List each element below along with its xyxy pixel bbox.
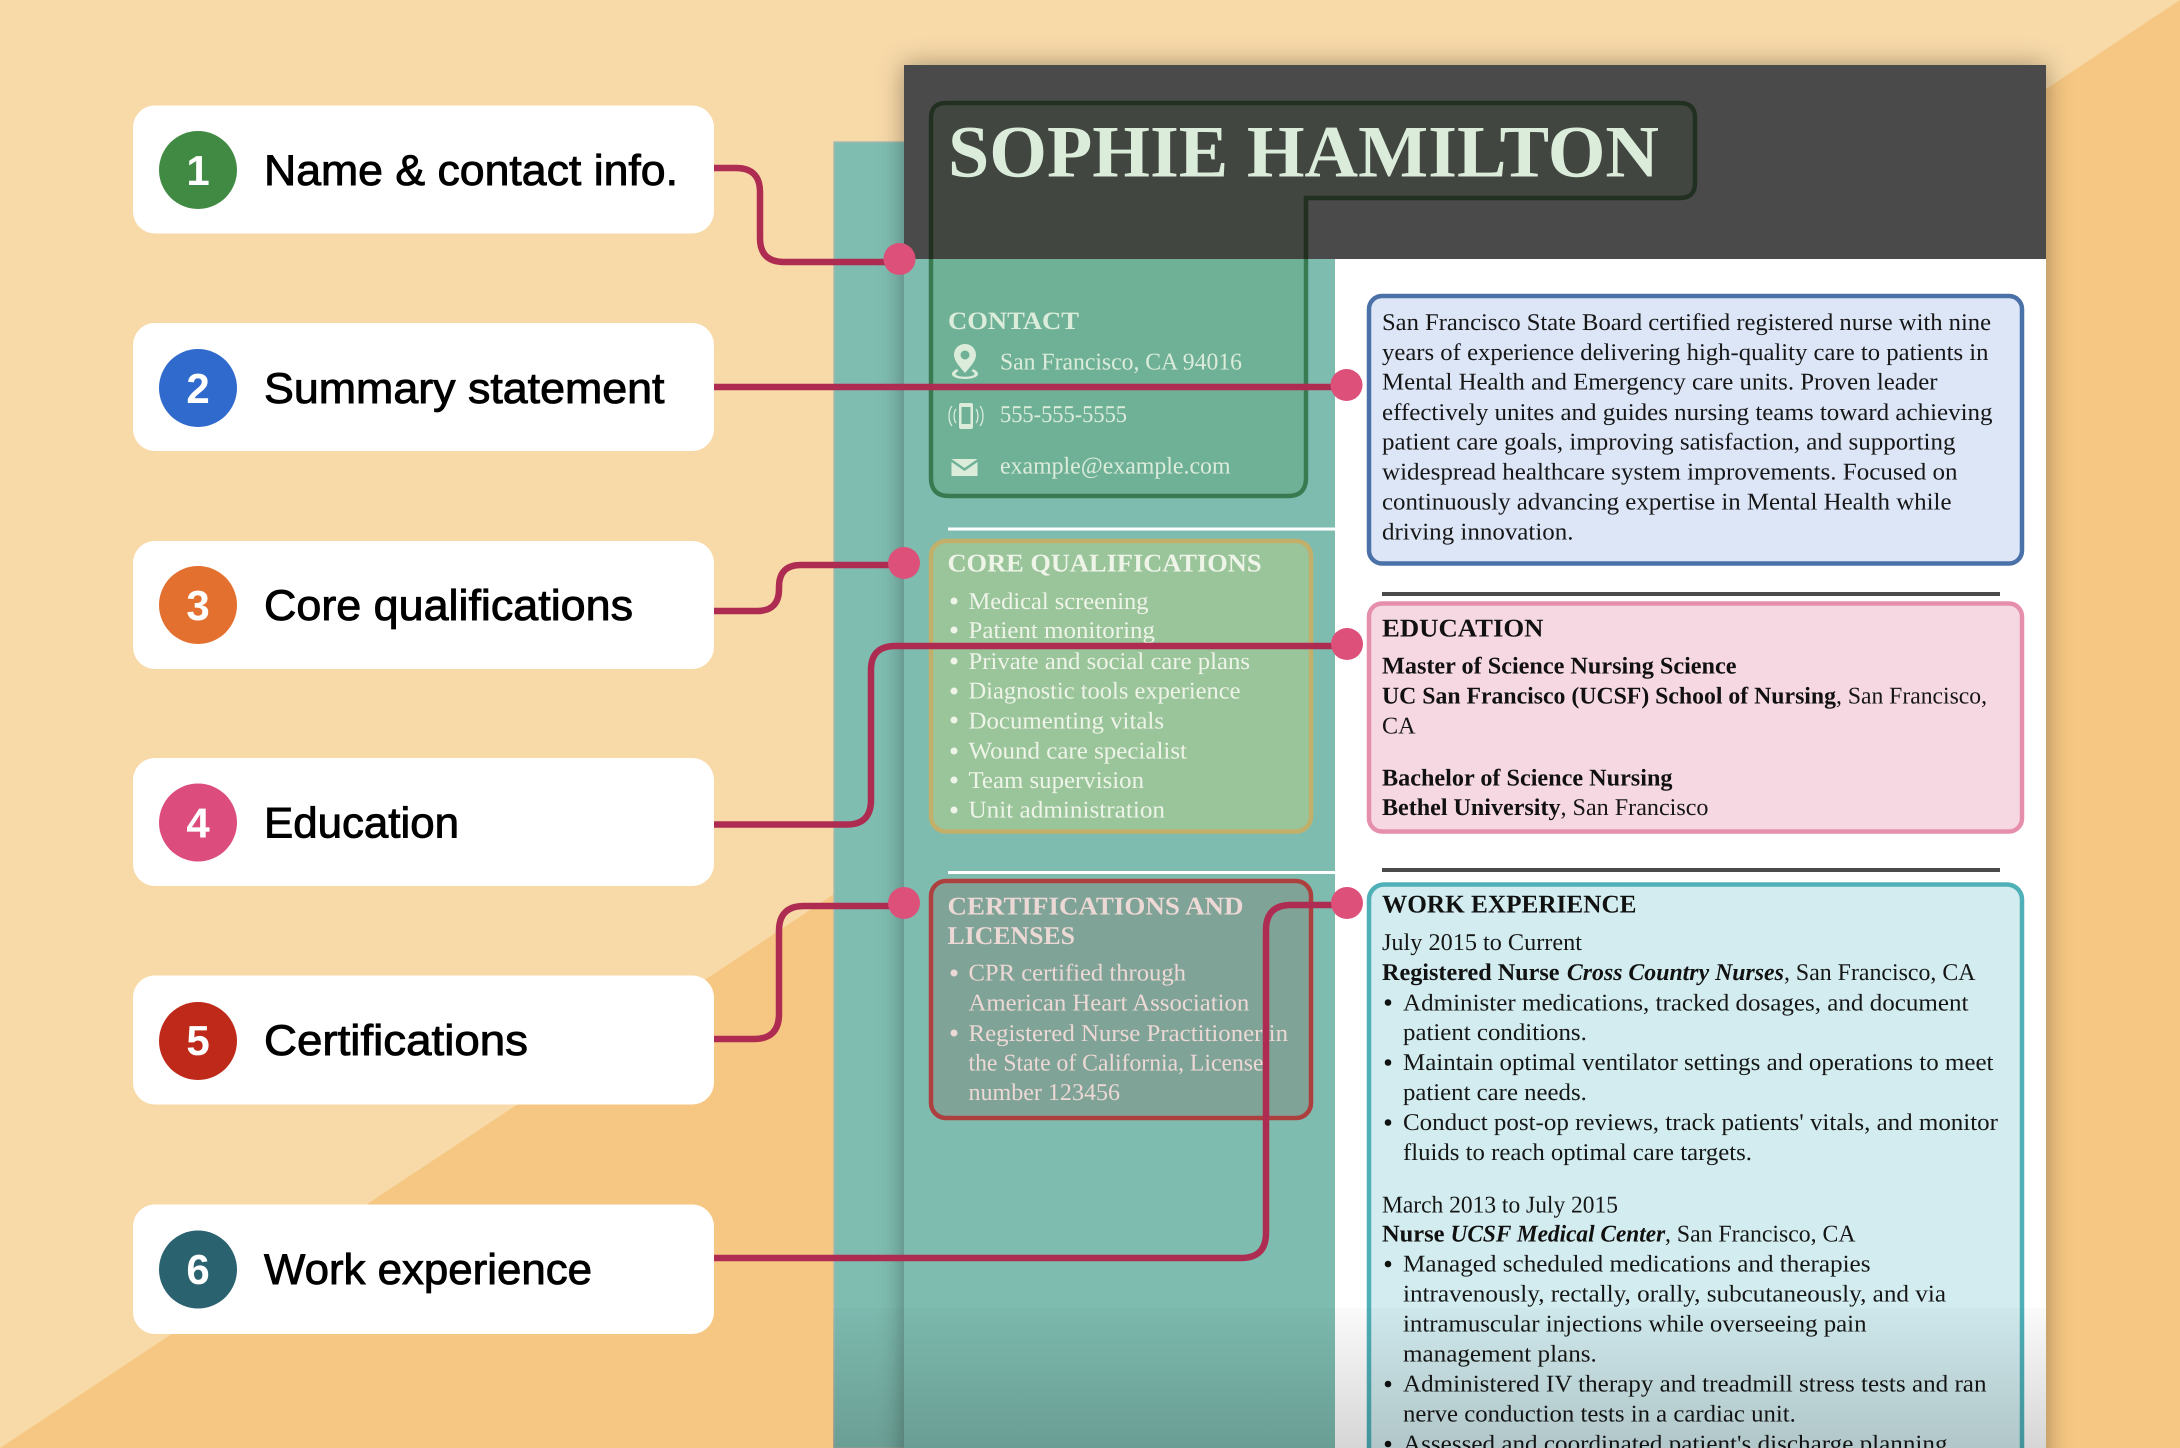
contact block (948, 308, 1242, 480)
job: Cross Country Nurses: Administer medications, tracked dosages, and document (1403, 990, 1969, 1016)
certifications list: Registered Nurse Practitioner in (968, 1021, 1288, 1047)
core qualifications list: Team supervision (968, 768, 1144, 794)
panel: work experience (1369, 884, 2022, 1448)
panel: summary statement: patient care goals, improving satisfaction, and supporting (1382, 430, 1956, 456)
job: UCSF Medical Center: intravenously, rectally, orally, subcutaneously, and via (1403, 1282, 1946, 1308)
contact block: San Francisco, CA 94016 (1000, 350, 1242, 376)
core qualifications list: Unit administration (968, 798, 1165, 824)
job: Cross Country Nurses: Maintain optimal ventilator settings and operations to meet (1403, 1050, 1994, 1076)
job: Cross Country Nurses: Cross Country Nurses (1567, 960, 1784, 986)
education entries: , San Francisco (1560, 795, 1708, 821)
resume page shadow (904, 65, 2046, 1448)
panel: summary statement: San Francisco State Board certified registered nurse with nine (1382, 310, 1991, 336)
panel: summary statement: continuously advancing expertise in Mental Health while (1382, 489, 1952, 515)
panel: summary statement: driving innovation. (1382, 519, 1574, 545)
certifications list: American Heart Association (968, 990, 1249, 1016)
job: Cross Country Nurses: July 2015 to Current (1382, 930, 1582, 956)
education entries: Master of Science Nursing Science (1382, 654, 1737, 680)
education entries: Bethel University (1382, 795, 1560, 821)
label 2: summary statement: Summary statement (264, 365, 665, 413)
job: UCSF Medical Center: Administered IV therapy and treadmill stress tests and ran (1403, 1372, 1986, 1398)
job: Cross Country Nurses: Conduct post-op reviews, track patients' vitals, and monitor (1403, 1110, 1998, 1136)
job: UCSF Medical Center: management plans. (1403, 1342, 1597, 1368)
job: UCSF Medical Center (1382, 1192, 1986, 1448)
work experience heading: WORK EXPERIENCE (1382, 890, 1636, 918)
panel: certifications and licenses (931, 881, 1311, 1118)
education entries: Bachelor of Science Nursing (1382, 766, 1672, 792)
education heading: EDUCATION (1382, 613, 1544, 642)
label 3: core qualifications: 3 (186, 582, 210, 629)
certifications list (950, 961, 1288, 1106)
label 5: certifications: Certifications (264, 1017, 528, 1065)
certifications heading: CERTIFICATIONS AND (948, 892, 1244, 921)
education entries: , San Francisco, (1836, 684, 1987, 710)
label 4: education: 4 (186, 800, 210, 846)
job: UCSF Medical Center: March 2013 to July 2015 (1382, 1192, 1618, 1218)
label 1: name and contact info: Name & contact info. (264, 147, 678, 195)
job: Cross Country Nurses (1382, 930, 1998, 1166)
education entries: CA (1382, 714, 1416, 740)
core qualifications list: Private and social care plans (968, 649, 1250, 675)
core qualifications list: Patient monitoring (968, 618, 1155, 644)
connector 2: summary (714, 369, 1362, 401)
panel: summary statement: widespread healthcare system improvements. Focused on (1382, 459, 1958, 485)
highlight: name and contact box (931, 103, 1695, 496)
connector 4: education (714, 628, 1363, 824)
label 5: certifications (133, 976, 714, 1104)
core qualifications list: Medical screening (968, 589, 1148, 615)
label 6: work experience (133, 1204, 714, 1334)
certifications list: number 123456 (968, 1080, 1120, 1106)
icon: phone (949, 403, 983, 429)
name heading: SOPHIE HAMILTON (948, 112, 1659, 194)
label 4: education: Education (264, 800, 459, 848)
certifications list: the State of California, License (968, 1050, 1264, 1076)
label 1: name and contact info: 1 (186, 147, 210, 194)
label 1: name and contact info (133, 106, 714, 234)
core qualifications list (950, 589, 1250, 824)
job: Cross Country Nurses: patient conditions. (1403, 1020, 1587, 1046)
label 5: certifications: 5 (186, 1017, 210, 1064)
core qualifications list: Wound care specialist (968, 738, 1187, 764)
core qualifications heading: CORE QUALIFICATIONS (948, 548, 1262, 578)
label 4: education (133, 758, 714, 886)
contact block: example@example.com (1000, 454, 1231, 480)
label 6: work experience: Work experience (264, 1246, 592, 1294)
resume back page strip (834, 142, 914, 1448)
label 3: core qualifications: Core qualifications (264, 582, 633, 630)
label 6: work experience: 6 (186, 1246, 210, 1293)
job: Cross Country Nurses: fluids to reach optimal care targets. (1403, 1140, 1752, 1166)
contact block: CONTACT (948, 308, 1079, 335)
connector 5: certifications (714, 887, 920, 1039)
icon: location pin (952, 344, 978, 379)
job: UCSF Medical Center: nerve conduction tests in a cardiac unit. (1403, 1402, 1796, 1428)
resume page (904, 65, 2046, 1448)
job: UCSF Medical Center: UCSF Medical Center (1450, 1222, 1666, 1248)
panel: summary statement: years of experience delivering high-quality care to patients in (1382, 340, 1988, 366)
core qualifications list: Documenting vitals (968, 708, 1164, 734)
panel: education (1369, 604, 2022, 832)
education entries: UC San Francisco (UCSF) School of Nursing (1382, 684, 1836, 710)
certifications heading (948, 892, 1244, 950)
job: Cross Country Nurses: Registered Nurse (1382, 960, 1560, 986)
icon: envelope (952, 459, 978, 476)
job: UCSF Medical Center: Nurse (1382, 1222, 1445, 1248)
job: Cross Country Nurses: patient care needs. (1403, 1080, 1587, 1106)
core qualifications list: Diagnostic tools experience (968, 679, 1240, 705)
panel: summary statement: effectively unites and guides nursing teams toward achieving (1382, 400, 1992, 426)
contact block: 555-555-5555 (1000, 402, 1127, 428)
connector 3: core qualifications (714, 547, 920, 611)
connector 6: work experience (714, 887, 1363, 1258)
label 3: core qualifications (133, 541, 714, 669)
panel: summary statement (1369, 296, 2022, 564)
certifications heading: LICENSES (948, 921, 1075, 950)
education entries (1382, 654, 1987, 821)
job: Cross Country Nurses: , San Francisco, CA (1784, 960, 1976, 986)
panel: core qualifications (931, 541, 1311, 832)
label 2: summary statement (133, 323, 714, 451)
job: UCSF Medical Center: , San Francisco, CA (1665, 1222, 1856, 1248)
label 2: summary statement: 2 (186, 365, 210, 412)
job: UCSF Medical Center: Managed scheduled medications and therapies (1403, 1252, 1870, 1278)
bottom fade over resume (833, 1308, 2046, 1448)
job: UCSF Medical Center: intramuscular injections while overseeing pain (1403, 1312, 1866, 1338)
connector 1: name and contact (714, 168, 916, 275)
certifications list: CPR certified through (968, 961, 1186, 987)
panel: summary statement: Mental Health and Emergency care units. Proven leader (1382, 370, 1938, 396)
